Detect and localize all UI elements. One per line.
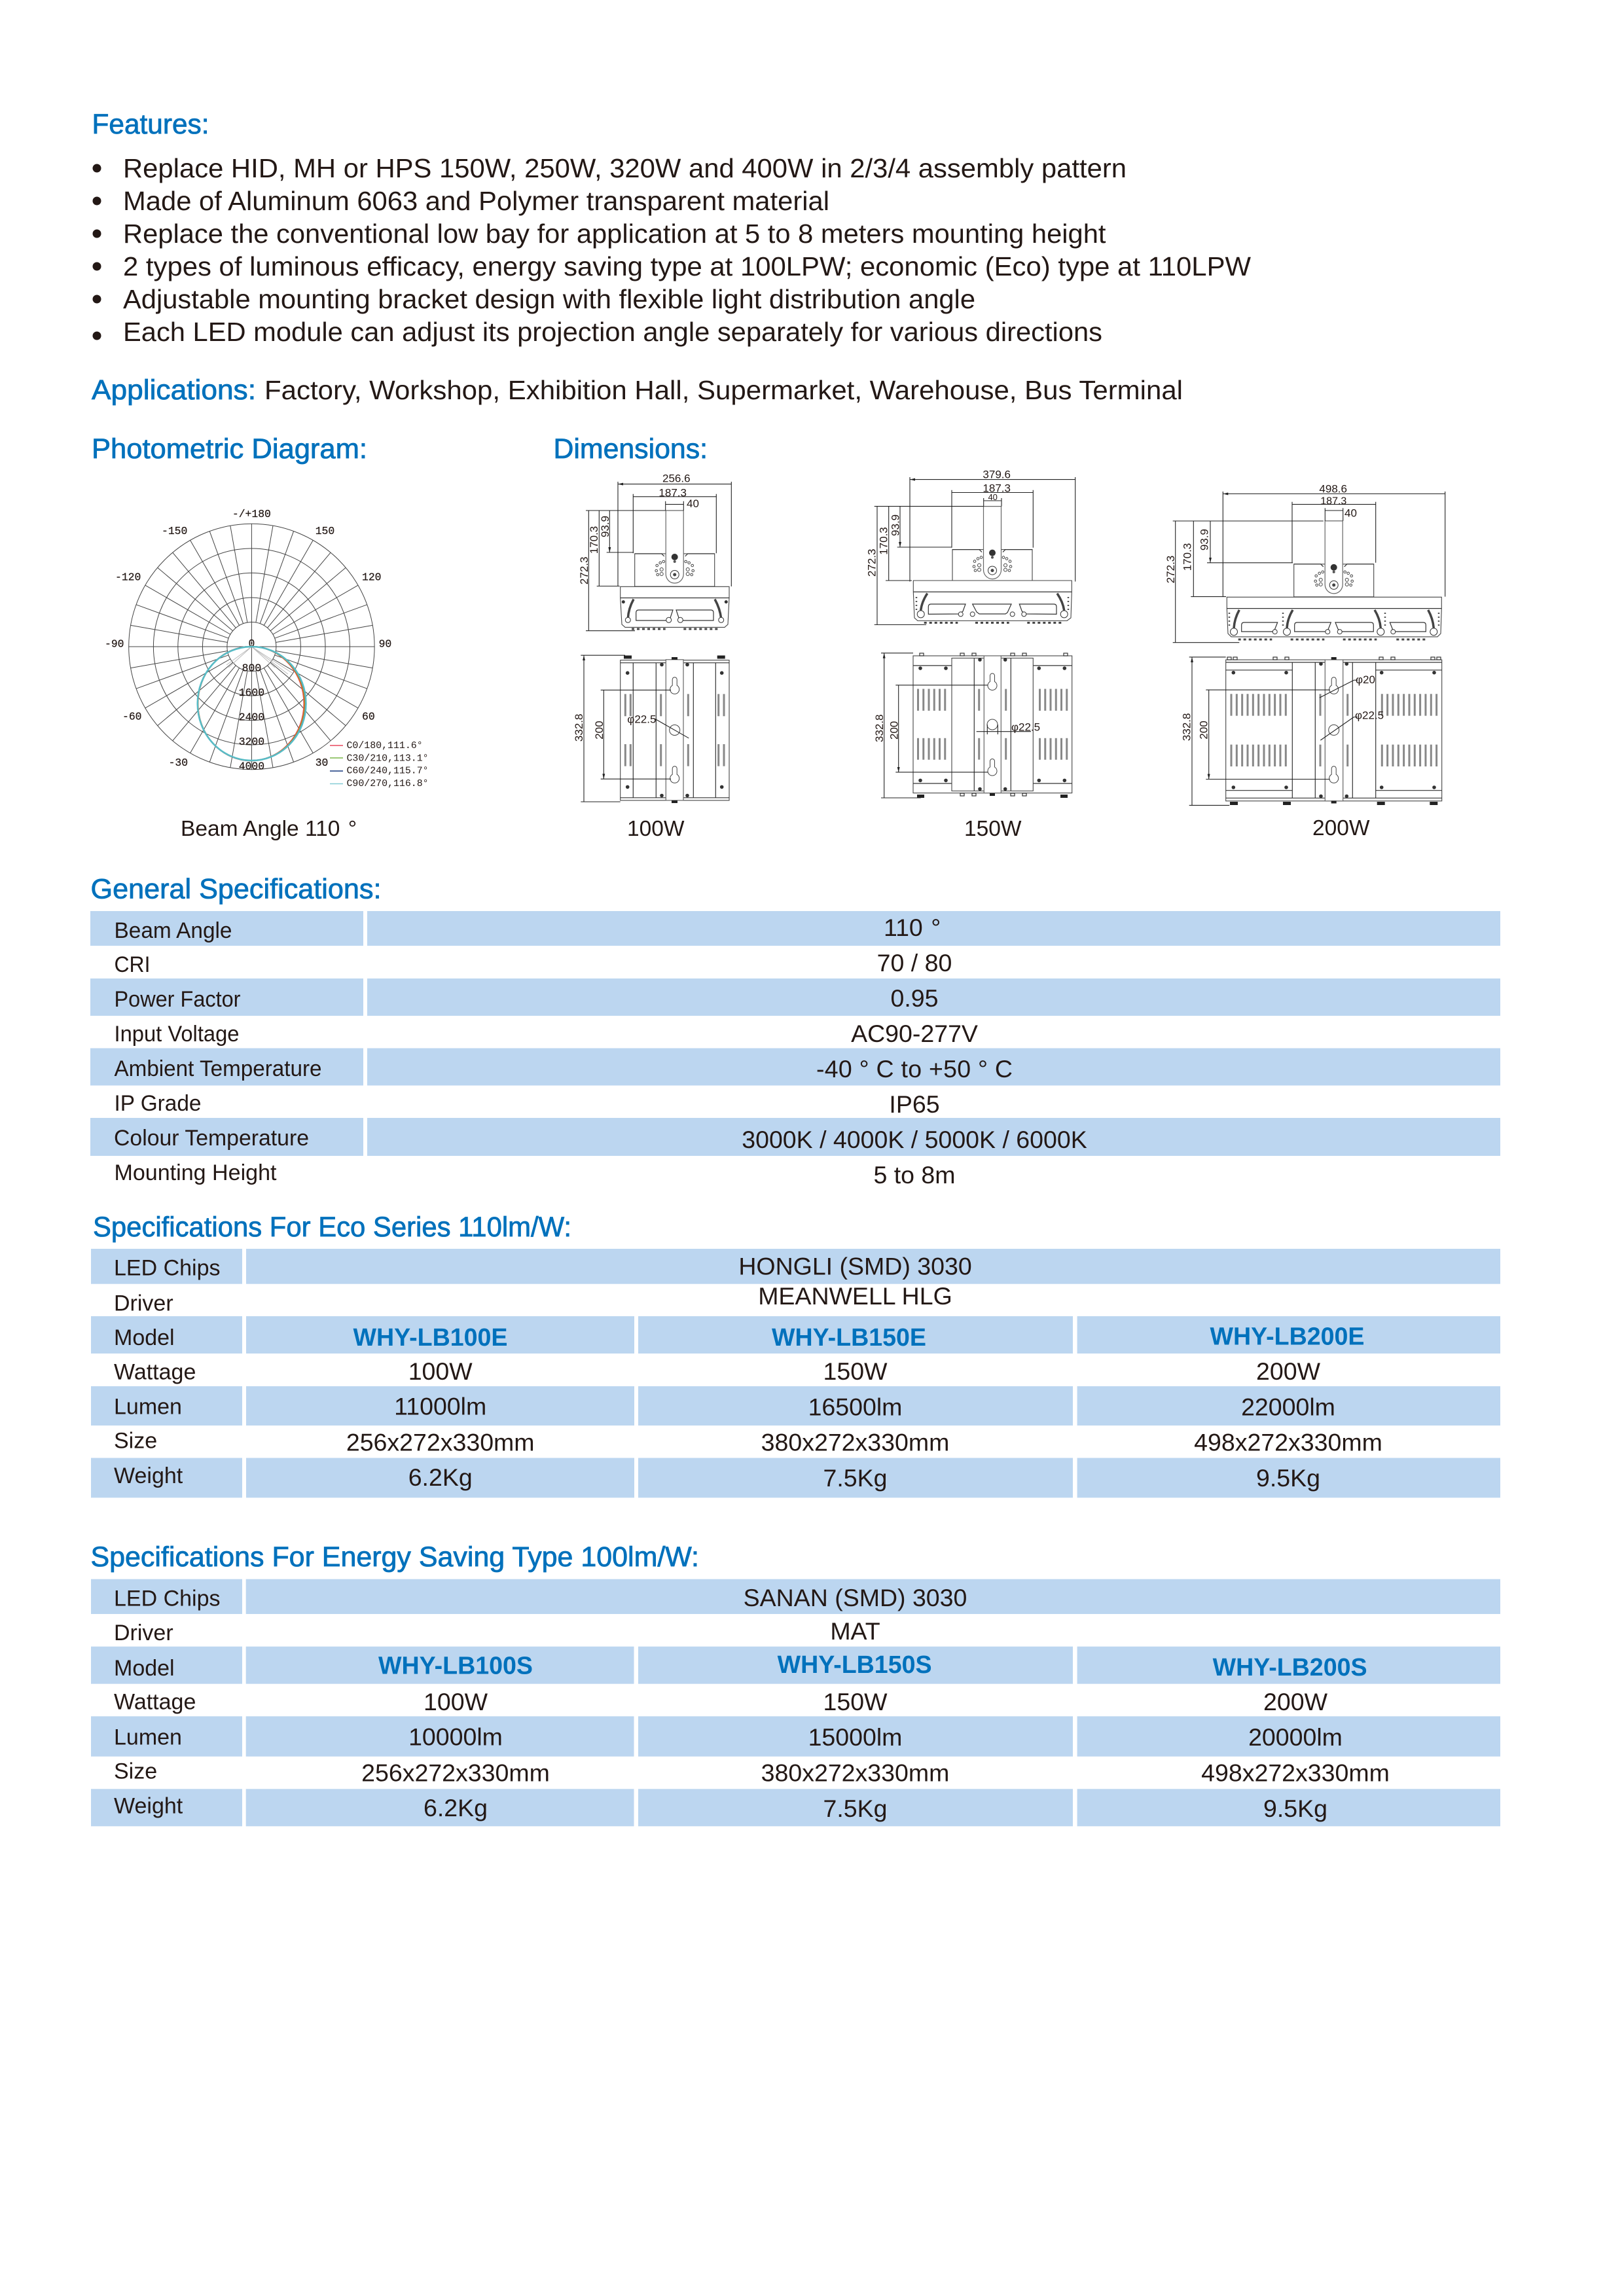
150W top view dimensions: φ22.5 — [1011, 721, 1040, 733]
200W side view dimensions: 272.3 — [1164, 556, 1177, 583]
column: WHY-LB150E: 7.5Kg — [823, 1464, 888, 1492]
angle labels: -120 — [115, 571, 141, 584]
200W top view dimensions — [1180, 657, 1384, 805]
table: Eco series — [91, 1249, 1500, 1498]
polar grid — [129, 524, 374, 770]
bullet item 5: Adjustable mounting bracket design with flexible light distribution angle — [123, 284, 975, 314]
100W side view dimensions — [578, 472, 731, 631]
column: WHY-LB200E: WHY-LB200E — [1210, 1322, 1364, 1350]
bullet item 1: Replace HID, MH or HPS 150W, 250W, 320W and 400W in 2/3/4 assembly pattern — [123, 153, 1127, 183]
column: WHY-LB150S: 7.5Kg — [823, 1795, 888, 1822]
curve legend: C60/240,115.7° — [347, 766, 429, 777]
100W top view — [621, 656, 729, 803]
intensity labels: 3200 — [239, 736, 264, 748]
200W side view dimensions: 170.3 — [1181, 543, 1193, 571]
column: WHY-LB200E: 498x272x330mm — [1194, 1429, 1382, 1456]
bullet item 2: Made of Aluminum 6063 and Polymer transparent material — [123, 186, 829, 216]
features bullet list — [93, 153, 1251, 347]
row bands — [91, 1249, 1500, 1498]
100W top view dimensions: φ22.5 — [627, 713, 656, 725]
angle labels: -90 — [105, 638, 124, 651]
row values: -40 ° C to +50 ° C — [816, 1055, 1013, 1083]
column: WHY-LB100E: 100W — [408, 1357, 473, 1385]
row values: IP65 — [889, 1090, 940, 1118]
column: WHY-LB150E: 16500lm — [808, 1393, 902, 1421]
shared values — [744, 1584, 967, 1645]
150W top view — [913, 653, 1072, 798]
intensity labels: 1600 — [239, 687, 264, 699]
row values: 110 ° — [884, 914, 941, 941]
column: WHY-LB150S: 380x272x330mm — [761, 1759, 949, 1787]
150W side view dimensions: 187.3 — [983, 482, 1011, 494]
200W top view dimensions: φ20 — [1356, 673, 1375, 686]
100W side view dimensions: 170.3 — [588, 526, 600, 554]
row labels: LED Chips — [114, 1587, 221, 1611]
row labels: Ambient Temperature — [114, 1056, 322, 1081]
column: WHY-LB200E — [1194, 1322, 1382, 1492]
column: WHY-LB100S: 100W — [424, 1688, 488, 1715]
100W side view — [621, 511, 729, 629]
angle labels — [105, 508, 391, 769]
curve legend: C0/180,111.6° — [347, 741, 423, 751]
column: WHY-LB200S: 20000lm — [1248, 1723, 1343, 1751]
row values: 3000K / 4000K / 5000K / 6000K — [742, 1126, 1087, 1153]
column: WHY-LB150E — [761, 1323, 949, 1492]
row values — [742, 914, 1087, 1189]
caption: 100W: 100W — [627, 817, 685, 841]
row labels: Mounting Height — [114, 1160, 277, 1185]
200W top view dimensions: 200 — [1197, 721, 1210, 740]
row labels: Weight — [114, 1793, 183, 1818]
caption: beam angle: Beam Angle 110 ° — [181, 817, 357, 841]
curve legend: C90/270,116.8° — [347, 779, 429, 789]
200W top view dimensions: φ22.5 — [1355, 709, 1384, 721]
applications line: Applications: — [92, 374, 256, 406]
row labels — [114, 918, 322, 1185]
shared values: HONGLI (SMD) 3030 — [738, 1253, 972, 1280]
row labels: Power Factor — [114, 987, 241, 1012]
curve legend — [330, 741, 429, 789]
row labels: IP Grade — [114, 1091, 202, 1116]
row labels: Wattage — [114, 1360, 196, 1385]
column: WHY-LB100E: 11000lm — [394, 1393, 486, 1420]
heading: Photometric Diagram: Photometric Diagram: — [92, 433, 367, 465]
shared values: SANAN (SMD) 3030 — [744, 1584, 967, 1611]
column: WHY-LB200S: 200W — [1263, 1688, 1328, 1715]
column: WHY-LB200E: 9.5Kg — [1256, 1464, 1320, 1492]
column: WHY-LB150S: 15000lm — [808, 1723, 902, 1751]
200W side view dimensions: 40 — [1344, 507, 1357, 520]
row labels: Colour Temperature — [114, 1126, 309, 1151]
200W side view dimensions: 498.6 — [1319, 483, 1347, 495]
drawing: 100W dimensions — [573, 472, 731, 803]
column: WHY-LB150S: WHY-LB150S — [778, 1651, 932, 1678]
100W top view dimensions: 200 — [593, 721, 605, 740]
angle labels: 120 — [362, 571, 382, 584]
200W top view dimensions: 332.8 — [1180, 713, 1193, 741]
column: WHY-LB200S: 498x272x330mm — [1201, 1759, 1390, 1787]
applications line: Factory, Workshop, Exhibition Hall, Supermarket, Warehouse, Bus Terminal — [264, 375, 1183, 405]
row labels: Beam Angle — [114, 918, 232, 943]
row labels: Driver — [114, 1291, 173, 1316]
table: general specifications — [90, 911, 1500, 1189]
column: WHY-LB200S: 9.5Kg — [1263, 1795, 1327, 1822]
angle labels: -150 — [162, 525, 187, 537]
column: WHY-LB100S: WHY-LB100S — [378, 1652, 533, 1679]
150W top view dimensions: 332.8 — [873, 714, 886, 742]
heading: Eco series specifications: Specifications For Eco Series 110lm/W: — [93, 1211, 571, 1243]
column: WHY-LB150S — [761, 1651, 949, 1822]
row labels: Size — [114, 1429, 157, 1454]
row values: 0.95 — [890, 984, 939, 1012]
bullet item 4: 2 types of luminous efficacy, energy saving type at 100LPW; economic (Eco) type at 110LPW — [123, 251, 1251, 281]
angle labels: -60 — [122, 711, 142, 723]
150W top view dimensions — [873, 653, 1040, 798]
150W side view dimensions: 170.3 — [878, 527, 890, 555]
bullet item 3: Replace the conventional low bay for application at 5 to 8 meters mounting height — [123, 219, 1106, 249]
column: WHY-LB100E: 256x272x330mm — [346, 1429, 535, 1456]
column: WHY-LB200E: 22000lm — [1241, 1393, 1335, 1421]
row values: 70 / 80 — [877, 949, 952, 977]
column: WHY-LB100S: 256x272x330mm — [361, 1759, 550, 1787]
column: WHY-LB150E: WHY-LB150E — [772, 1323, 926, 1351]
column: WHY-LB100S — [361, 1652, 550, 1821]
100W side view dimensions: 93.9 — [599, 516, 611, 537]
heading: Dimensions: Dimensions: — [554, 433, 708, 465]
heading: General Specifications: General Specifications: — [90, 873, 381, 905]
row labels: Wattage — [114, 1690, 196, 1715]
150W side view — [913, 507, 1072, 623]
column: WHY-LB150E: 150W — [823, 1357, 888, 1385]
angle labels: 150 — [316, 525, 334, 537]
shared values — [738, 1253, 972, 1310]
100W side view dimensions: 187.3 — [659, 486, 687, 499]
column: WHY-LB200S: WHY-LB200S — [1213, 1653, 1367, 1681]
caption: 150W: 150W — [964, 817, 1022, 841]
100W side view dimensions: 256.6 — [662, 472, 691, 484]
100W top view dimensions — [573, 655, 689, 802]
angle labels: -/+180 — [232, 508, 271, 520]
intensity labels: 0 — [248, 637, 255, 650]
column: WHY-LB150S: 150W — [823, 1688, 888, 1715]
100W top view dimensions: 332.8 — [573, 714, 585, 742]
150W top view dimensions: 200 — [888, 721, 900, 740]
row labels: Model — [114, 1656, 175, 1681]
150W side view dimensions: 272.3 — [865, 549, 878, 577]
row labels: Lumen — [114, 1394, 182, 1419]
row values: AC90-277V — [851, 1020, 978, 1047]
bullet item 6: Each LED module can adjust its projection angle separately for various directions — [123, 317, 1102, 347]
heading: Features: Features: — [92, 109, 209, 140]
150W side view dimensions: 379.6 — [983, 469, 1011, 481]
light distribution curves — [198, 647, 306, 761]
column: WHY-LB200S — [1201, 1653, 1390, 1822]
row labels: Model — [114, 1325, 175, 1350]
column: WHY-LB100S: 10000lm — [408, 1723, 503, 1751]
100W side view dimensions: 40 — [687, 497, 699, 510]
column: WHY-LB200E: 200W — [1256, 1357, 1321, 1385]
100W side view dimensions: 272.3 — [578, 557, 590, 584]
row labels: CRI — [114, 952, 151, 977]
200W side view — [1227, 521, 1441, 639]
column: WHY-LB100E — [346, 1323, 535, 1491]
column: WHY-LB100E: WHY-LB100E — [353, 1323, 507, 1351]
intensity labels: 2400 — [239, 711, 264, 723]
row labels: Input Voltage — [114, 1022, 240, 1047]
row values: 5 to 8m — [873, 1161, 956, 1189]
intensity labels: 4000 — [239, 761, 264, 772]
row labels: Lumen — [114, 1725, 182, 1750]
shared values: MAT — [830, 1617, 880, 1645]
intensity labels: 800 — [242, 662, 261, 675]
200W side view dimensions — [1164, 483, 1445, 643]
chart: photometric polar diagram — [105, 508, 429, 789]
row labels: Weight — [114, 1463, 183, 1488]
heading: Energy saving specifications: Specifications For Energy Saving Type 100lm/W: — [90, 1541, 699, 1573]
angle labels: 60 — [362, 711, 375, 723]
column: WHY-LB100E: 6.2Kg — [408, 1463, 473, 1491]
angle labels: 90 — [379, 638, 391, 651]
intensity labels — [239, 637, 264, 772]
curve legend: C30/210,113.1° — [347, 753, 429, 764]
table: Energy saving type — [91, 1579, 1500, 1826]
200W top view — [1226, 657, 1442, 805]
column: WHY-LB100S: 6.2Kg — [424, 1794, 488, 1821]
caption: 200W: 200W — [1312, 816, 1370, 840]
150W side view dimensions: 40 — [988, 492, 998, 502]
column: WHY-LB150E: 380x272x330mm — [761, 1429, 949, 1456]
row labels — [114, 1587, 221, 1818]
row labels: Size — [114, 1759, 157, 1784]
angle labels: 30 — [316, 757, 328, 769]
shared values: MEANWELL HLG — [758, 1282, 952, 1310]
angle labels: -30 — [169, 757, 188, 769]
200W side view dimensions: 93.9 — [1198, 529, 1210, 550]
row bands — [90, 911, 1500, 1156]
row bands — [91, 1579, 1500, 1826]
150W side view dimensions — [865, 469, 1075, 624]
200W side view dimensions: 187.3 — [1320, 496, 1346, 507]
drawing: 200W dimensions — [1164, 483, 1445, 805]
150W side view dimensions: 93.9 — [889, 514, 901, 536]
row labels: Driver — [114, 1621, 173, 1645]
row labels — [114, 1255, 221, 1488]
row labels: LED Chips — [114, 1255, 221, 1280]
drawing: 150W dimensions — [865, 469, 1075, 798]
